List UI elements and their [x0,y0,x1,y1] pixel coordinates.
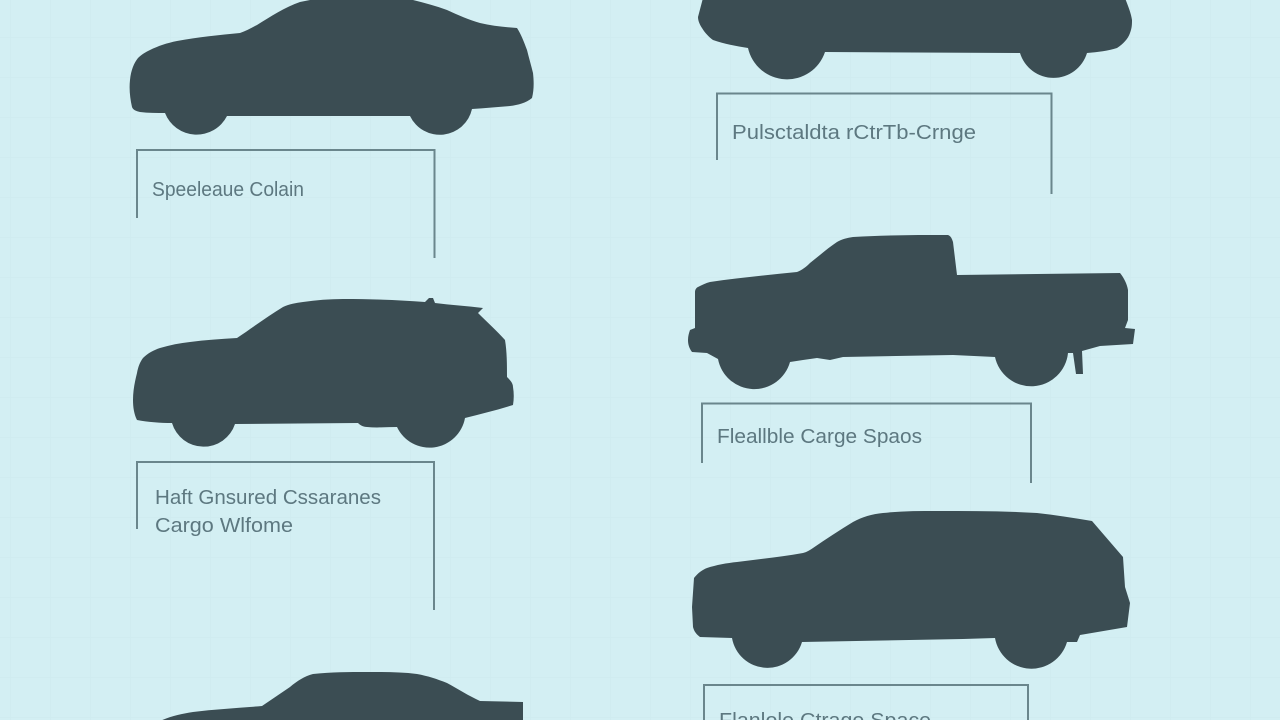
panel: pickup truck [688,235,1135,483]
bracket: pickup truck label frame [702,404,1031,483]
label: compact SUV, two lines [155,487,381,537]
panel: large SUV [692,511,1130,720]
icon: compact SUV silhouette [133,298,514,448]
bracket: wide sedan label frame [717,94,1052,194]
bracket: large SUV label frame [704,685,1028,720]
icon: bottom sedan silhouette [158,672,523,720]
icon: pickup truck silhouette [688,235,1135,389]
panel: coupe [130,0,534,258]
label: pickup truck: Fleallble Carge Spaos [717,426,922,448]
label: wide sedan: Pulsctaldta rCtrTb-Crnge [732,122,976,144]
label: coupe: Speeleaue Colain [152,179,304,201]
panel: wide sedan [698,0,1132,194]
panel: compact SUV [133,298,514,610]
label: compact SUV, two lines: Cargo Wlfome [155,515,293,537]
bracket: compact SUV label frame [137,462,434,610]
icon: wide sedan silhouette [698,0,1132,79]
label: compact SUV, two lines: Haft Gnsured Cssaranes [155,487,381,509]
icon: large SUV silhouette [692,511,1130,669]
bracket: coupe label frame [137,150,434,258]
icon: coupe silhouette [130,0,534,135]
